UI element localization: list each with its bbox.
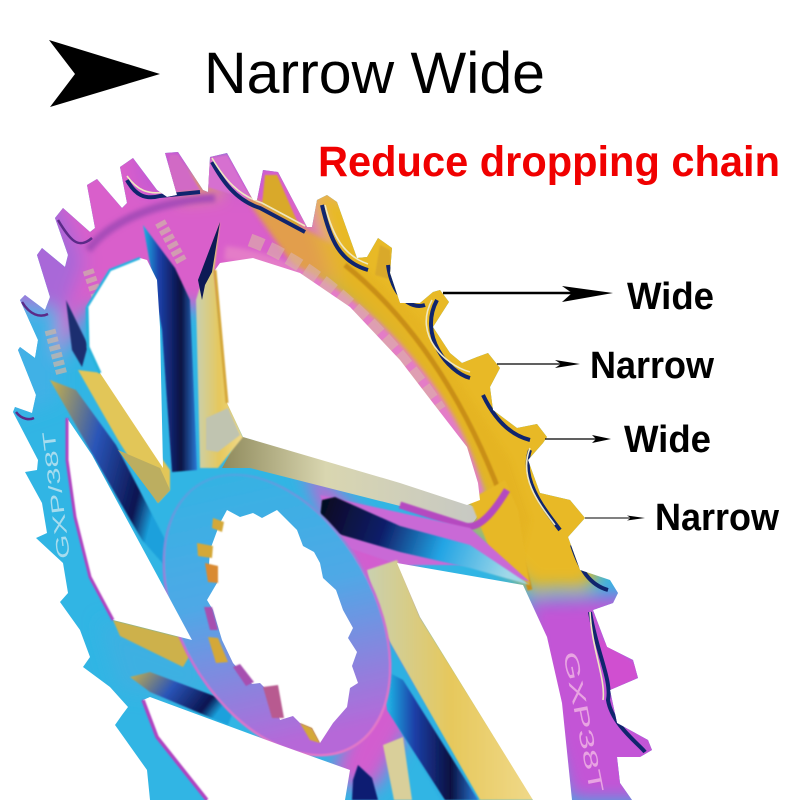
callout arrow: wide 2 <box>545 435 611 443</box>
upper left small yellow top of hub slot <box>118 450 170 503</box>
right spoke band pink <box>320 495 530 582</box>
engraved logo stripes on top ring <box>250 240 440 410</box>
spline detail lower stem <box>233 664 254 686</box>
yellow on tooth tops <box>208 154 252 200</box>
hole: upper left <box>87 258 163 468</box>
left spike slot <box>66 300 88 367</box>
hole: left <box>67 418 192 640</box>
gray spoke <box>222 436 482 527</box>
chainring <box>0 130 680 800</box>
dark spike on upper yellow spoke <box>198 222 220 300</box>
spline detail lower left <box>208 637 228 663</box>
pink inner ring edge <box>225 253 478 495</box>
magenta highlight on top ring <box>88 198 215 250</box>
spline detail left <box>205 563 218 583</box>
label: wide 2: Wide <box>624 419 711 461</box>
purple teeth lower right <box>598 638 637 690</box>
left diagonal slot <box>50 380 168 566</box>
darker yellow rim stripe <box>345 265 530 590</box>
lower right slot <box>387 672 478 800</box>
callout arrow: narrow 1 <box>497 360 580 368</box>
spline detail upper left <box>197 543 213 558</box>
lower right yellow spoke <box>367 560 535 800</box>
upper vertical slot <box>143 225 197 472</box>
spline detail bottom <box>263 685 284 718</box>
lower-left slot <box>130 672 233 725</box>
spline detail bottom right <box>300 723 320 743</box>
left yellow spoke <box>78 370 170 503</box>
upper yellow spoke <box>196 222 243 468</box>
hole: bottom right <box>397 563 572 800</box>
label: narrow 2: Narrow <box>655 497 779 539</box>
spline teeth shading <box>197 518 320 743</box>
spline detail top <box>212 518 224 532</box>
title: Narrow Wide <box>204 41 545 106</box>
hole: top large <box>215 258 480 505</box>
label: narrow 1: Narrow <box>590 345 714 387</box>
silver band on upper spoke <box>206 408 240 452</box>
lower-left yellow wedge <box>113 620 192 667</box>
top right yellow highlights <box>243 190 494 490</box>
right spoke pink edge line <box>400 490 507 527</box>
right spoke yellow corner <box>470 480 530 585</box>
bottom small slot <box>352 765 378 800</box>
subtitle: Reduce dropping chain <box>318 138 780 186</box>
callout arrow: wide 1 <box>443 286 613 302</box>
right spoke slot <box>320 497 530 585</box>
title arrow icon <box>49 40 160 107</box>
bottom yellow spoke <box>383 737 412 800</box>
lower right spoke cyan edge <box>360 575 480 800</box>
label: wide 1: Wide <box>627 276 714 318</box>
hole: bottom left <box>143 697 350 800</box>
hub ring <box>117 435 437 795</box>
engraved text right: GXP38T <box>558 650 607 794</box>
engraved text left: GXP/38T <box>39 430 74 560</box>
spline detail left stem <box>204 607 218 630</box>
chainring body colours <box>0 130 680 800</box>
hub centre spline opening <box>207 510 358 743</box>
hole edge accents <box>67 258 227 800</box>
callout arrow: narrow 2 <box>585 516 645 520</box>
tooth rim shading <box>16 158 645 752</box>
engraved logos upper left <box>50 222 182 375</box>
